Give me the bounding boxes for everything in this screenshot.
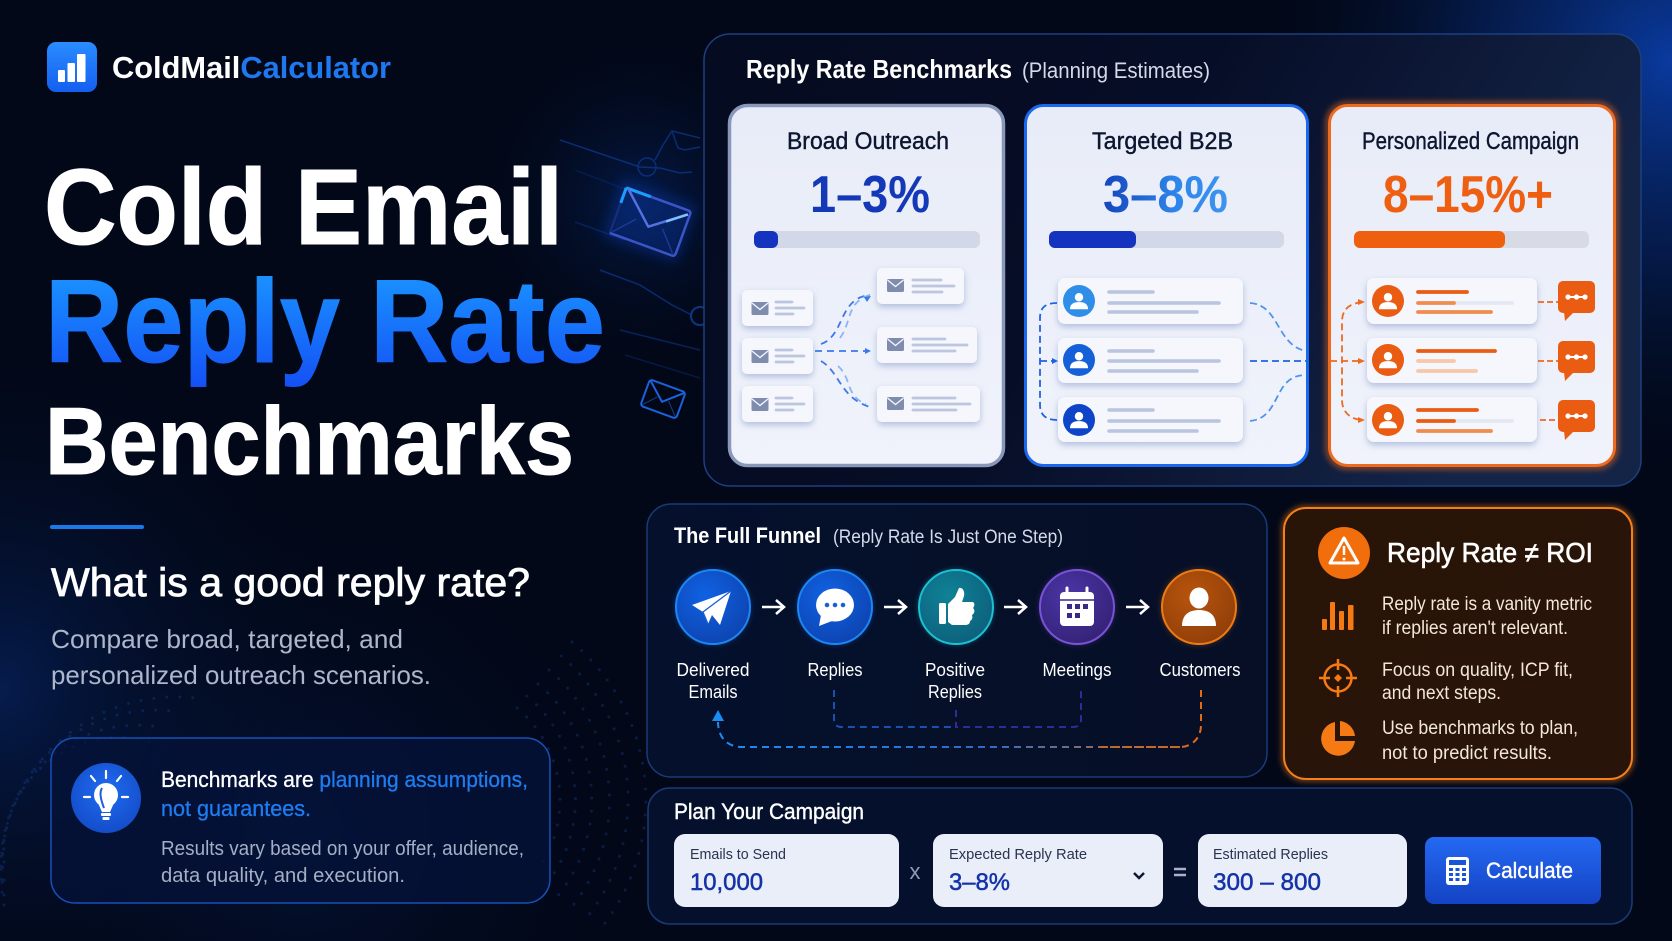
description: personalized outreach scenarios. — [51, 660, 431, 690]
arrow — [1004, 600, 1026, 614]
icon: pie chart — [1321, 721, 1355, 756]
text: use benchmarks: Use benchmarks to plan, — [1382, 718, 1578, 739]
step: meetings: Meetings — [1042, 660, 1112, 680]
input: emails to send: 10,000 — [690, 869, 763, 896]
card: broad outreach: 1–3% — [810, 166, 930, 224]
step: positive replies — [918, 569, 994, 702]
button: calculate: Calculate — [1486, 858, 1573, 883]
title: Reply Rate — [45, 256, 605, 388]
step: customers — [1160, 569, 1240, 680]
input: emails to send: Emails to Send — [690, 846, 786, 863]
text: focus on quality — [1382, 660, 1573, 704]
text: focus on quality: and next steps. — [1382, 683, 1501, 704]
text: vanity metric — [1382, 594, 1592, 639]
arrow — [884, 600, 906, 614]
equals sign — [1174, 869, 1186, 875]
panel: reply rate benchmarks — [704, 34, 1641, 486]
description: Compare broad, targeted, and — [51, 624, 403, 654]
button: calculate — [1425, 837, 1601, 904]
panel: full funnel — [647, 504, 1267, 777]
callout: planning assumptions — [51, 738, 550, 903]
arrowhead — [712, 710, 724, 721]
callout text — [161, 767, 528, 887]
step: meetings — [1039, 569, 1115, 680]
icon: bars — [1322, 602, 1354, 630]
callout text: Benchmarks are planning assumptions, — [161, 767, 528, 792]
title: Cold Email — [44, 146, 563, 267]
icon: calculator — [1446, 857, 1469, 885]
icon: bar chart logo — [47, 42, 97, 92]
input: expected reply rate: Expected Reply Rate — [949, 846, 1087, 863]
ROI heading: Reply Rate ≠ ROI — [1387, 537, 1593, 568]
divider accent — [50, 525, 144, 529]
diagram: personalized contact rows — [1330, 278, 1595, 442]
step: delivered emails: Delivered — [676, 660, 750, 680]
step: replies: Replies — [808, 660, 862, 680]
diagram: targeted contact rows — [1040, 278, 1306, 442]
funnel heading: The Full Funnel — [674, 523, 821, 548]
text: focus on quality: Focus on quality, ICP fit, — [1382, 660, 1573, 681]
panel: reply rate not equal ROI — [1284, 508, 1632, 779]
step: delivered emails: Emails — [688, 682, 738, 702]
multiply sign: x — [910, 859, 920, 884]
output: estimated replies — [1198, 834, 1407, 907]
callout text: Results vary based on your offer, audience, — [161, 838, 524, 860]
panel heading: Reply Rate Benchmarks — [746, 54, 1012, 84]
step: positive replies: Replies — [928, 682, 982, 702]
title: Benchmarks — [45, 388, 574, 495]
icon: light bulb — [71, 763, 141, 833]
input: expected reply rate — [933, 834, 1163, 907]
arrow — [1126, 600, 1148, 614]
feedback dashed connectors — [718, 690, 1201, 747]
text: vanity metric: if replies aren't relevant. — [1382, 618, 1568, 639]
callout text: data quality, and execution. — [161, 865, 405, 887]
text: vanity metric: Reply rate is a vanity metric — [1382, 594, 1592, 615]
input: expected reply rate: 3–8% — [949, 869, 1010, 896]
card: personalized campaign: 8–15%+ — [1383, 166, 1553, 224]
step: positive replies: Positive — [925, 660, 985, 680]
step: replies — [797, 569, 873, 680]
logo — [47, 42, 391, 92]
card: targeted B2B — [1026, 106, 1308, 466]
icon: warning — [1318, 527, 1370, 579]
card: personalized campaign — [1328, 104, 1616, 467]
panel subheading: (Planning Estimates) — [1022, 58, 1210, 83]
brand name: ColdMailCalculator — [112, 50, 391, 85]
card: targeted B2B: 3–8% — [1103, 166, 1228, 224]
arrow — [762, 600, 784, 614]
panel: plan your campaign — [648, 788, 1632, 924]
card: targeted B2B: Targeted B2B — [1092, 128, 1233, 155]
funnel subheading: (Reply Rate Is Just One Step) — [833, 527, 1063, 548]
description — [51, 624, 431, 690]
callout text: not guarantees. — [161, 796, 311, 821]
card: broad outreach: Broad Outreach — [787, 128, 949, 155]
step: customers: Customers — [1160, 660, 1240, 680]
plan heading: Plan Your Campaign — [674, 799, 864, 824]
input: emails to send — [674, 834, 899, 907]
card: broad outreach — [730, 106, 1004, 466]
icon: target — [1319, 659, 1357, 697]
output: estimated replies: Estimated Replies — [1213, 846, 1328, 863]
decorative flying envelopes — [560, 131, 709, 419]
diagram: broad email spray — [742, 268, 980, 422]
title — [44, 146, 605, 495]
step: delivered emails — [675, 569, 751, 702]
text: use benchmarks: not to predict results. — [1382, 743, 1552, 764]
subheading: What is a good reply rate? — [51, 561, 530, 605]
card: personalized campaign: Personalized Campaign — [1362, 128, 1579, 155]
text: use benchmarks — [1382, 718, 1578, 764]
output: estimated replies: 300 – 800 — [1213, 869, 1321, 896]
